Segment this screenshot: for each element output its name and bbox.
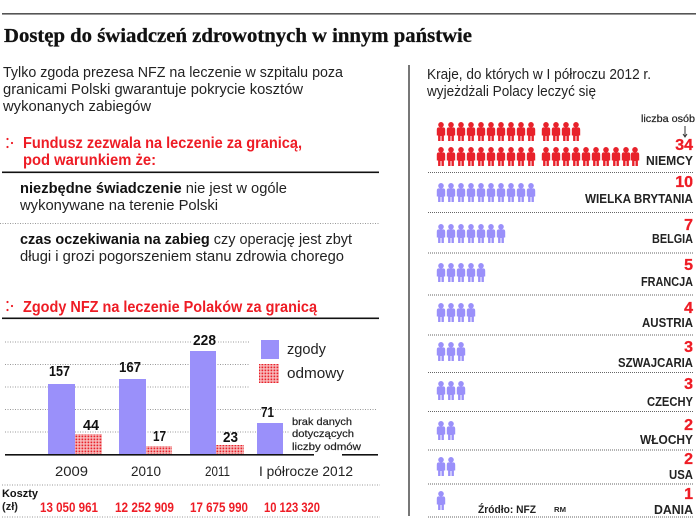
value labels: 44: [83, 417, 100, 434]
source: Źródło: NFZ: [478, 503, 536, 516]
row: Belgia: 7: [684, 217, 693, 234]
row: Dania: 1: [684, 486, 693, 503]
costs row: 17 675 990: [190, 499, 248, 515]
panel: countries: [428, 113, 695, 517]
intro text: wykonanych zabiegów: [2, 98, 151, 115]
icon: red dots bullet: [6, 138, 13, 148]
intro text: Tylko zgoda prezesa NFZ na leczenie w szpitalu poza: [3, 64, 344, 81]
row: Niemcy: [437, 122, 693, 168]
value labels: 71: [261, 404, 274, 421]
costs row: 10 123 320: [264, 499, 320, 515]
top rule: [2, 13, 696, 15]
note: no data: liczby odmów: [292, 441, 361, 453]
text block: condition two: długi i grozi pogorszeniem stanu zdrowia chorego: [20, 248, 344, 265]
legend: odmowy: [287, 366, 345, 382]
costs row: 13 050 961: [40, 499, 98, 515]
row: Wielka Brytania: 10: [675, 174, 693, 191]
row: USA: 2: [684, 451, 693, 468]
year labels: [55, 463, 353, 479]
row: Włochy: [437, 417, 693, 447]
title: Dostęp do świadczeń zdrowotnych w innym państwie: [4, 25, 472, 47]
year labels: 2010: [131, 463, 161, 479]
text block: condition one: niezbędne świadczenie nie jest w ogóle: [20, 180, 287, 197]
costs row: 12 252 909: [115, 499, 174, 515]
right panel heading: wyjeżdżali Polacy leczyć się: [426, 83, 596, 100]
row: Niemcy: NIEMCY: [646, 153, 693, 168]
value labels: 23: [223, 429, 238, 446]
row: Dania: [437, 486, 694, 517]
row: Belgia: [437, 217, 693, 246]
bar 2012: [257, 423, 283, 455]
intro text: granicami Polski gwarantuje pokrycie kosztów: [3, 81, 303, 98]
year labels: 2009: [55, 463, 88, 479]
value labels: 17: [153, 428, 166, 445]
row: Wielka Brytania: [437, 174, 694, 206]
intro text: [2, 64, 344, 115]
panel: conditions: [0, 135, 380, 265]
row: Francja: [437, 257, 694, 289]
text block: condition one: [19, 180, 287, 214]
value labels: 228: [193, 332, 216, 349]
heading: conditions: [23, 135, 302, 169]
source: [478, 503, 566, 516]
bar chart: [5, 332, 378, 479]
row: Włochy: 2: [684, 417, 693, 434]
legend: [259, 340, 345, 383]
note: no data: [292, 416, 361, 453]
label: number of people: liczba osób: [641, 113, 695, 125]
column divider: [408, 65, 410, 516]
year labels: 2011: [205, 463, 230, 479]
heading: approvals: Zgody NFZ na leczenie Polaków za granicą: [23, 299, 317, 316]
row: Czechy: [437, 376, 693, 409]
heading: conditions: Fundusz zezwala na leczenie za granicą,: [23, 135, 302, 152]
row: Austria: [437, 300, 694, 330]
row: Niemcy: 34: [675, 137, 693, 154]
axis: [5, 454, 378, 456]
note: no data: dotyczących: [292, 428, 354, 440]
row: Szwajcaria: [437, 339, 694, 370]
bars 2009: [48, 384, 102, 455]
right panel heading: [426, 66, 651, 100]
heading: conditions: pod warunkiem że:: [23, 152, 156, 169]
row: USA: USA: [669, 467, 694, 482]
bars 2011: [190, 351, 244, 455]
bars 2010: [119, 379, 172, 455]
note: no data: brak danych: [292, 416, 352, 428]
legend: zgody: [287, 342, 327, 358]
value labels: [49, 332, 274, 446]
value labels: 157: [49, 363, 70, 380]
year labels: I półrocze 2012: [259, 463, 353, 479]
text block: condition one: wykonywane na terenie Polski: [19, 197, 218, 214]
costs row: [2, 488, 320, 515]
costs row: (zł): [2, 501, 18, 513]
label: number of people: [641, 113, 695, 137]
text block: condition two: [20, 231, 353, 265]
source: RM: [554, 507, 566, 514]
row: Dania: DANIA: [654, 502, 694, 517]
panel: approvals chart: [2, 299, 380, 517]
row: Francja: 5: [684, 257, 693, 274]
row: Austria: 4: [684, 300, 693, 317]
text block: condition two: czas oczekiwania na zabieg czy operację jest zbyt: [20, 231, 353, 248]
costs row: Koszty: [2, 488, 39, 500]
row: Czechy: 3: [684, 376, 693, 393]
right panel heading: Kraje, do których w I półroczu 2012 r.: [427, 66, 651, 83]
row: USA: [437, 451, 694, 482]
value labels: 167: [119, 359, 141, 376]
icon: red dots bullet: [6, 301, 13, 311]
row: Szwajcaria: 3: [684, 339, 693, 356]
